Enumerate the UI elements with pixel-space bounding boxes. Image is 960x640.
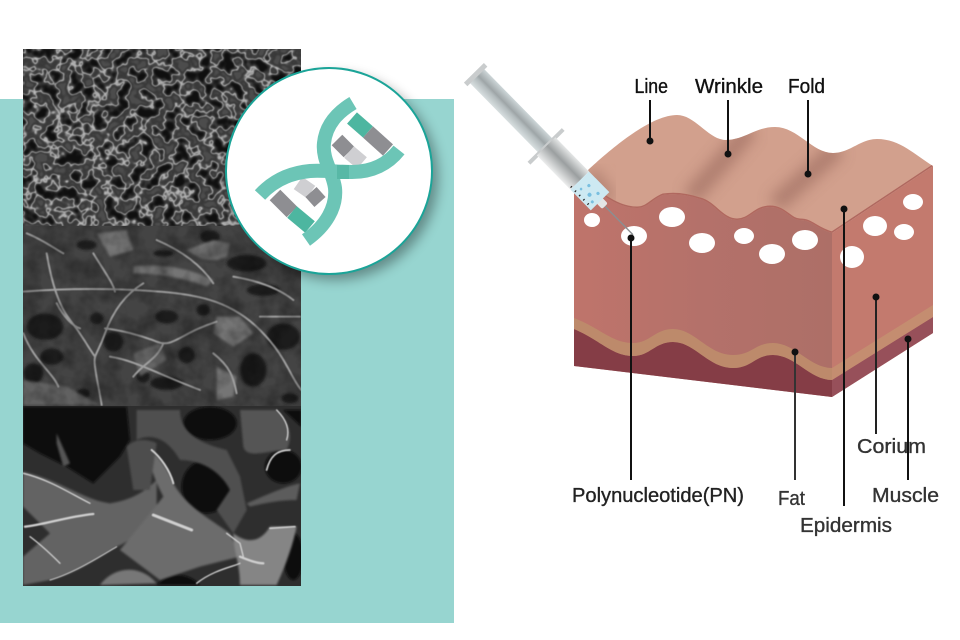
icon: DNA helix: [260, 103, 399, 240]
label: Polynucleotide(PN): [572, 234, 744, 507]
teal background panel: [0, 99, 454, 623]
needle: [602, 203, 634, 235]
pores: white holes: [584, 194, 923, 268]
label: Fat: Fat: [778, 488, 805, 510]
label: Polynucleotide(PN): Polynucleotide(PN): [572, 485, 744, 507]
label: Line: Line: [634, 76, 668, 98]
label: Wrinkle: [695, 76, 763, 158]
plunger rod: [469, 68, 555, 155]
label: Fat: [778, 348, 805, 510]
right face: corium: [832, 166, 933, 397]
label: Muscle: [872, 336, 939, 507]
top surface: epidermis: [588, 115, 933, 233]
label: Line: [634, 76, 668, 144]
fat band front: [574, 318, 832, 380]
label: Epidermis: Epidermis: [800, 515, 892, 537]
badge shadow: [232, 74, 438, 280]
photo: porous micro-structure: [23, 49, 301, 226]
barrel: [537, 137, 589, 190]
skin cross-section diagram: [574, 115, 933, 397]
liquid chamber: [569, 170, 609, 210]
muscle layer front: [574, 329, 832, 397]
photo: fibrous micro-structure: [23, 226, 301, 406]
label: Muscle: Muscle: [872, 485, 939, 507]
label: Fold: Fold: [788, 76, 825, 98]
front face: corium: [574, 190, 832, 397]
badge circle: [226, 68, 432, 274]
needle hub: [597, 198, 608, 209]
barrel flange: [528, 128, 565, 165]
label: Corium: [857, 294, 926, 458]
icon: syringe: [457, 56, 650, 252]
muscle layer right: [832, 317, 933, 397]
DNA badge: [226, 68, 438, 280]
plunger flange: [464, 63, 487, 86]
label: Epidermis: [800, 206, 892, 537]
label: Fold: [788, 76, 825, 178]
label: Corium: Corium: [857, 436, 926, 458]
photo: coarse sheet micro-structure: [23, 406, 303, 586]
fat band right: [832, 305, 933, 380]
label: Wrinkle: Wrinkle: [695, 76, 763, 98]
